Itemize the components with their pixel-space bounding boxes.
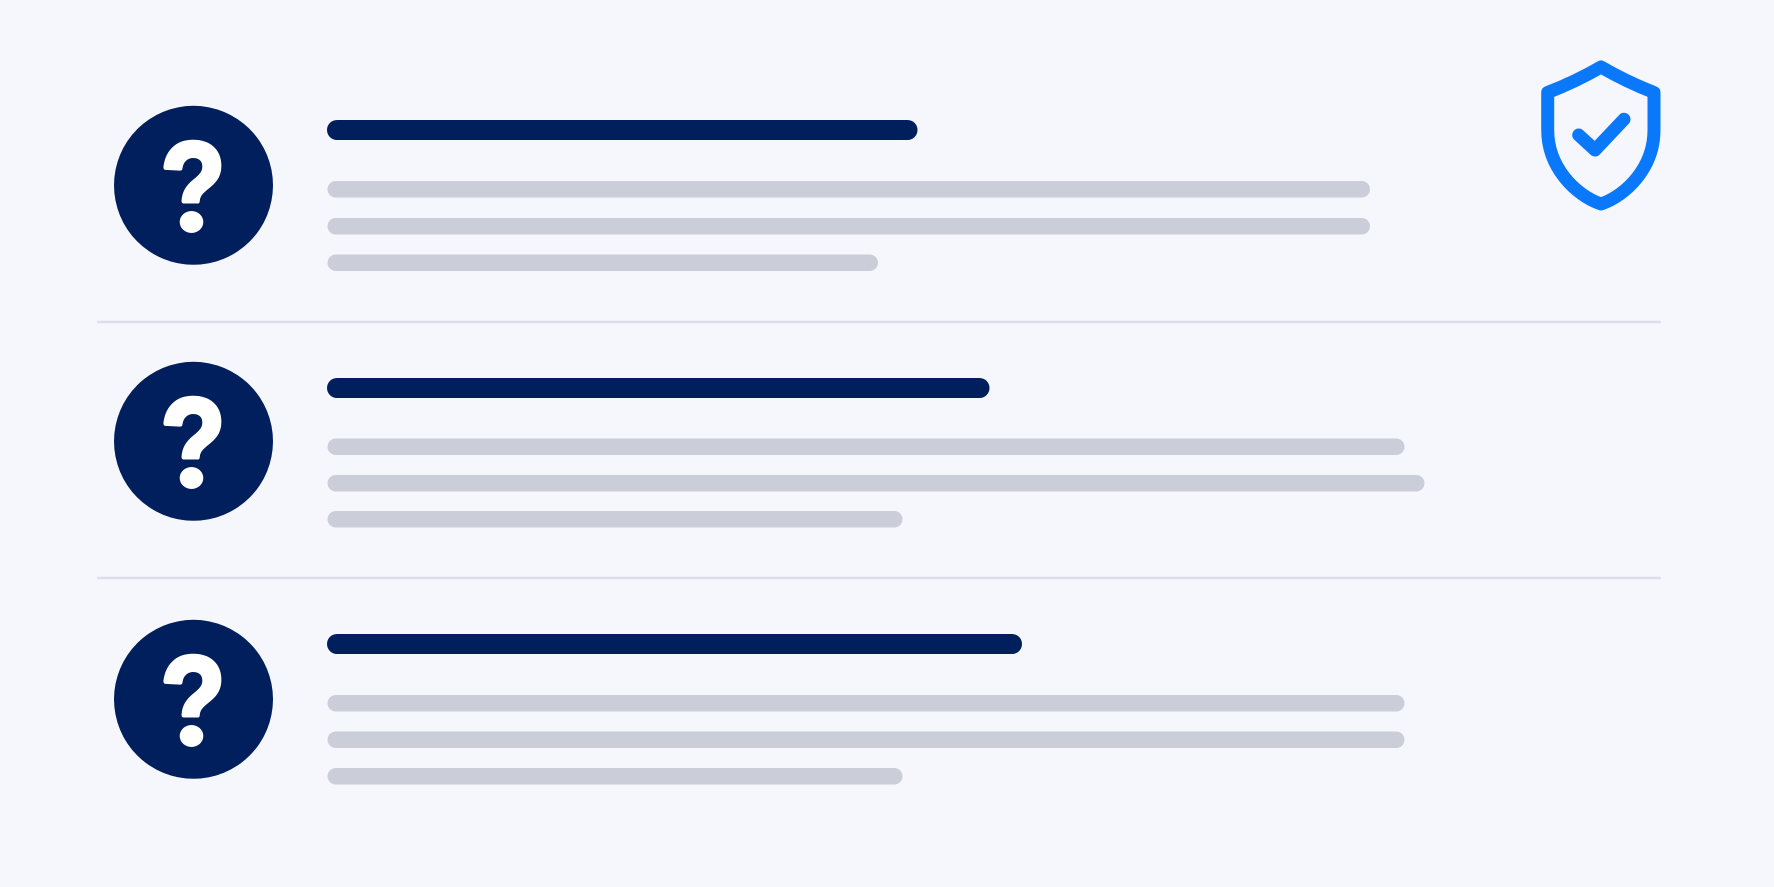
panel: question 3 xyxy=(114,620,1404,784)
panel: question 2 xyxy=(114,362,1424,528)
icon: question mark badge 1: ? xyxy=(161,118,225,251)
text block 2 xyxy=(328,438,1424,528)
heading bar 3 xyxy=(327,634,1022,654)
icon: blue shield with check mark xyxy=(1548,67,1654,204)
icon: question mark badge 3: ? xyxy=(161,632,225,765)
heading bar 2 xyxy=(327,378,990,398)
heading bar 1 xyxy=(327,120,918,140)
icon: question mark badge 2 xyxy=(114,362,273,521)
icon: question mark badge 1 xyxy=(114,106,273,265)
icon: question mark badge 2: ? xyxy=(161,374,225,507)
text block 1 xyxy=(328,181,1370,271)
icon: question mark badge 3 xyxy=(114,620,273,779)
text block 3 xyxy=(328,695,1404,784)
panel: question 1 xyxy=(114,106,1370,271)
